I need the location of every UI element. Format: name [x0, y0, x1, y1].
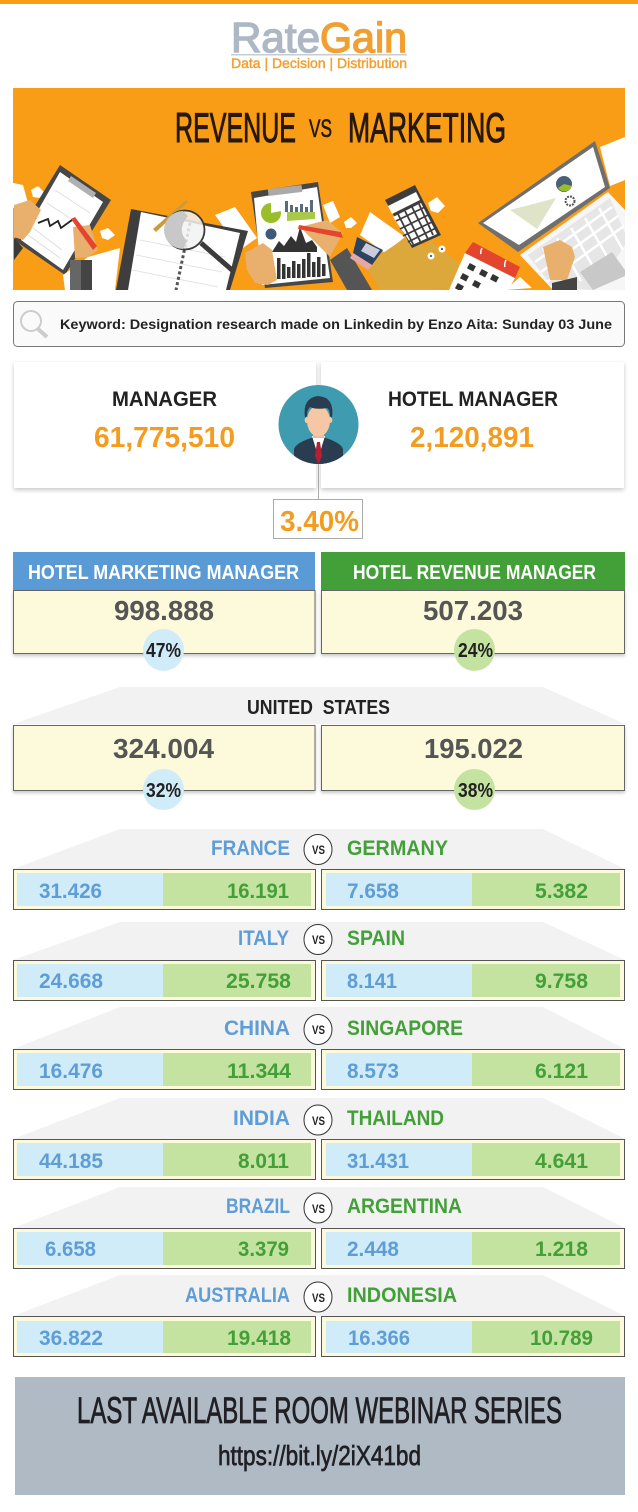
icon: envelope [365, 238, 465, 290]
row: Brazil vs Argentina: 1.218 [535, 1238, 588, 1261]
stat: US revenue: 195.022 [424, 733, 523, 764]
row: Brazil vs Argentina: VS [312, 1202, 325, 1216]
row: Italy vs Spain: 8.141 [347, 970, 397, 993]
stat: marketing total [14, 590, 315, 671]
search bar [14, 302, 624, 346]
row: Italy vs Spain [13, 922, 625, 1000]
banner panel [13, 88, 625, 292]
panel: manager [14, 362, 316, 488]
footer panel: webinar series: https://bit.ly/2iX41bd [218, 1440, 421, 1471]
header: hotel marketing manager [13, 552, 315, 590]
header: hotel revenue manager [321, 552, 625, 590]
row: Italy vs Spain: 24.668 [39, 970, 103, 993]
stat: US marketing: 32% [146, 780, 181, 802]
row: Australia vs Indonesia: AUSTRALIA [185, 1284, 290, 1307]
logo: RateGain: Data | Decision | Distribution [231, 55, 407, 71]
panel: hotel manager: HOTEL MANAGER [388, 388, 558, 411]
row: Italy vs Spain: 25.758 [226, 970, 291, 993]
banner title: MARKETING [348, 104, 506, 151]
panel: manager: 61,775,510 [94, 422, 235, 454]
stat: revenue total: 507.203 [423, 595, 523, 626]
icon: scattered white papers [13, 137, 625, 290]
row: India vs Thailand [13, 1098, 625, 1180]
logo: RateGain [231, 14, 407, 71]
panel: manager: MANAGER [112, 388, 217, 411]
stat: US revenue [322, 726, 624, 810]
row: India vs Thailand: INDIA [233, 1107, 290, 1130]
icon: floppy disk [350, 237, 383, 270]
icon: center clipboard with charts [245, 182, 372, 290]
stat: marketing total: 998.888 [114, 595, 214, 626]
icon: laptop with chart [478, 141, 625, 290]
icon: left clipboard with hands [14, 165, 120, 290]
row: China vs Singapore: 11.344 [227, 1060, 291, 1083]
row: France vs Germany: 7.658 [347, 880, 399, 903]
row: Brazil vs Argentina: 3.379 [238, 1238, 289, 1261]
row: France vs Germany [13, 829, 625, 910]
panel: hotel manager [321, 362, 624, 488]
row: Brazil vs Argentina: BRAZIL [226, 1195, 290, 1218]
row: India vs Thailand: THAILAND [347, 1107, 444, 1130]
row: India vs Thailand: 4.641 [535, 1150, 588, 1173]
row: India vs Thailand: 8.011 [238, 1150, 289, 1173]
panel: hotel manager: 2,120,891 [410, 422, 534, 454]
row: Australia vs Indonesia [13, 1275, 625, 1356]
banner title: REVENUE [175, 104, 296, 151]
row: Italy vs Spain: VS [312, 933, 325, 947]
row: China vs Singapore: 16.476 [39, 1060, 103, 1083]
icon: calendar [449, 242, 520, 292]
callout: 3.40%: 3.40% [280, 506, 359, 538]
stat: US marketing: 324.004 [113, 733, 214, 764]
row: Australia vs Indonesia: 16.366 [348, 1327, 410, 1350]
row: Italy vs Spain: SPAIN [347, 927, 405, 950]
row: China vs Singapore: 8.573 [347, 1060, 399, 1083]
row: Australia vs Indonesia: 10.789 [530, 1327, 593, 1350]
row: Australia vs Indonesia: 36.822 [39, 1327, 103, 1350]
row: China vs Singapore [13, 1007, 625, 1090]
row: India vs Thailand: VS [312, 1114, 325, 1128]
icon: magnifier [21, 311, 47, 337]
logo: RateGain: Rate [231, 14, 320, 61]
row: Brazil vs Argentina: 6.658 [45, 1238, 96, 1261]
stat: marketing total: 47% [146, 640, 181, 662]
banner illustration: desk with documents [13, 137, 625, 292]
row: Italy vs Spain: ITALY [238, 927, 289, 950]
header: hotel revenue manager: HOTEL REVENUE MANAGER [353, 562, 596, 584]
top orange bar [0, 0, 638, 4]
row: Australia vs Indonesia: INDONESIA [347, 1284, 457, 1307]
row: France vs Germany: 5.382 [535, 880, 588, 903]
row: Brazil vs Argentina: ARGENTINA [347, 1195, 462, 1218]
section: united states [13, 687, 625, 810]
footer panel: webinar series [15, 1377, 625, 1495]
row: France vs Germany: GERMANY [347, 837, 448, 860]
stat: revenue total: 24% [458, 640, 493, 662]
row: India vs Thailand: 44.185 [39, 1150, 103, 1173]
row: France vs Germany: FRANCE [211, 837, 290, 860]
row: Italy vs Spain: 9.758 [535, 970, 588, 993]
banner title: VS [309, 115, 332, 143]
stat: US marketing [14, 726, 315, 810]
row: China vs Singapore: VS [312, 1023, 325, 1037]
logo: RateGain: Gain [320, 14, 407, 61]
connector line [318, 464, 320, 499]
keyword text: Keyword: Designation research made on Linkedin by Enzo Aita: Sunday 03 June [60, 317, 613, 332]
section: united states: UNITED STATES [247, 697, 390, 719]
row: Australia vs Indonesia: 19.418 [227, 1327, 291, 1350]
icon: notebook with magnifier [116, 200, 248, 290]
icon: calculator [385, 185, 446, 260]
banner title [175, 104, 506, 151]
header: hotel marketing manager: HOTEL MARKETING MANAGER [28, 562, 299, 584]
row: Australia vs Indonesia: VS [312, 1291, 325, 1305]
row: France vs Germany: VS [312, 843, 325, 857]
row: Brazil vs Argentina: 2.448 [347, 1238, 399, 1261]
icon: businessman avatar [278, 385, 358, 466]
row: France vs Germany: 31.426 [39, 880, 102, 903]
row: China vs Singapore: CHINA [224, 1017, 290, 1040]
row: Brazil vs Argentina [13, 1187, 625, 1268]
stat: US revenue: 38% [458, 780, 493, 802]
row: India vs Thailand: 31.431 [347, 1150, 409, 1173]
row: China vs Singapore: SINGAPORE [347, 1017, 463, 1040]
stat: revenue total [322, 590, 624, 671]
row: France vs Germany: 16.191 [227, 880, 289, 903]
row: China vs Singapore: 6.121 [535, 1060, 588, 1083]
